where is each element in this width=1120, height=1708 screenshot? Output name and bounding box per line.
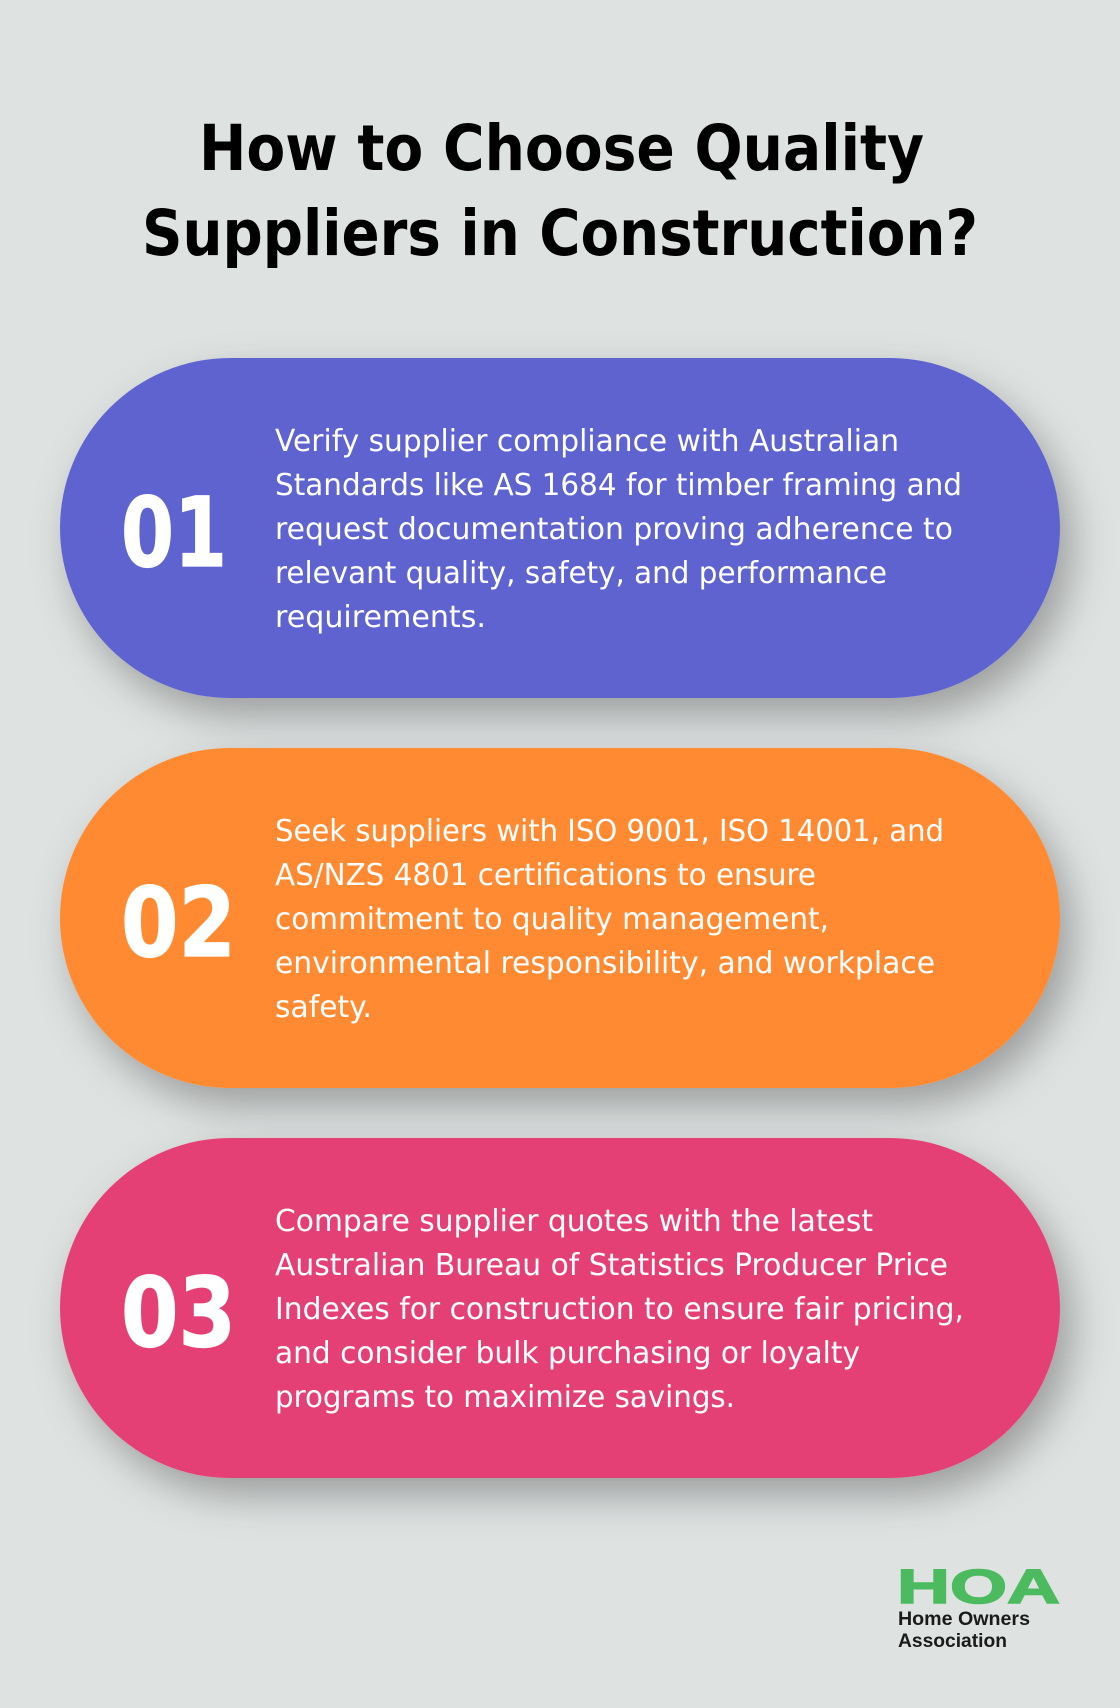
- number 01: 01: [121, 477, 227, 589]
- text block 02: commitment to quality management,: [275, 902, 829, 937]
- title: How to Choose Quality: [199, 112, 924, 185]
- panel: step 02: [60, 748, 1060, 1088]
- text block 02: AS/NZS 4801 certifications to ensure: [275, 858, 816, 893]
- logo: HOA: [897, 1561, 1060, 1652]
- text block 01: request documentation proving adherence to: [275, 512, 953, 547]
- text block 01: [275, 424, 962, 635]
- text block 03: [275, 1204, 964, 1415]
- text block 01: relevant quality, safety, and performance: [275, 556, 887, 591]
- text block 03: Australian Bureau of Statistics Producer Price: [275, 1248, 948, 1283]
- pill background 01: [60, 358, 1060, 698]
- title: [142, 112, 978, 270]
- text block 03: and consider bulk purchasing or loyalty: [275, 1336, 860, 1371]
- panel: step 03: [60, 1138, 1060, 1478]
- text block 01: Verify supplier compliance with Australian: [275, 424, 899, 459]
- logo: HOA: HOA: [897, 1561, 1060, 1614]
- logo: HOA: Association: [898, 1631, 1007, 1652]
- title: Suppliers in Construction?: [142, 197, 978, 270]
- text block 01: Standards like AS 1684 for timber framing and: [275, 468, 962, 503]
- text block 02: environmental responsibility, and workplace: [275, 946, 935, 981]
- text block 02: safety.: [275, 990, 372, 1025]
- text block 03: Compare supplier quotes with the latest: [275, 1204, 873, 1239]
- text block 02: [275, 814, 944, 1025]
- pill background 02: [60, 748, 1060, 1088]
- text block 03: programs to maximize savings.: [275, 1380, 735, 1415]
- text block 01: requirements.: [275, 600, 486, 635]
- number 02: 02: [121, 867, 236, 979]
- text block 02: Seek suppliers with ISO 9001, ISO 14001, and: [275, 814, 944, 849]
- number 03: 03: [121, 1257, 236, 1369]
- pill background 03: [60, 1138, 1060, 1478]
- text block 03: Indexes for construction to ensure fair pricing,: [275, 1292, 964, 1327]
- logo: HOA: Home Owners: [898, 1609, 1030, 1630]
- panel: step 01: [60, 358, 1060, 698]
